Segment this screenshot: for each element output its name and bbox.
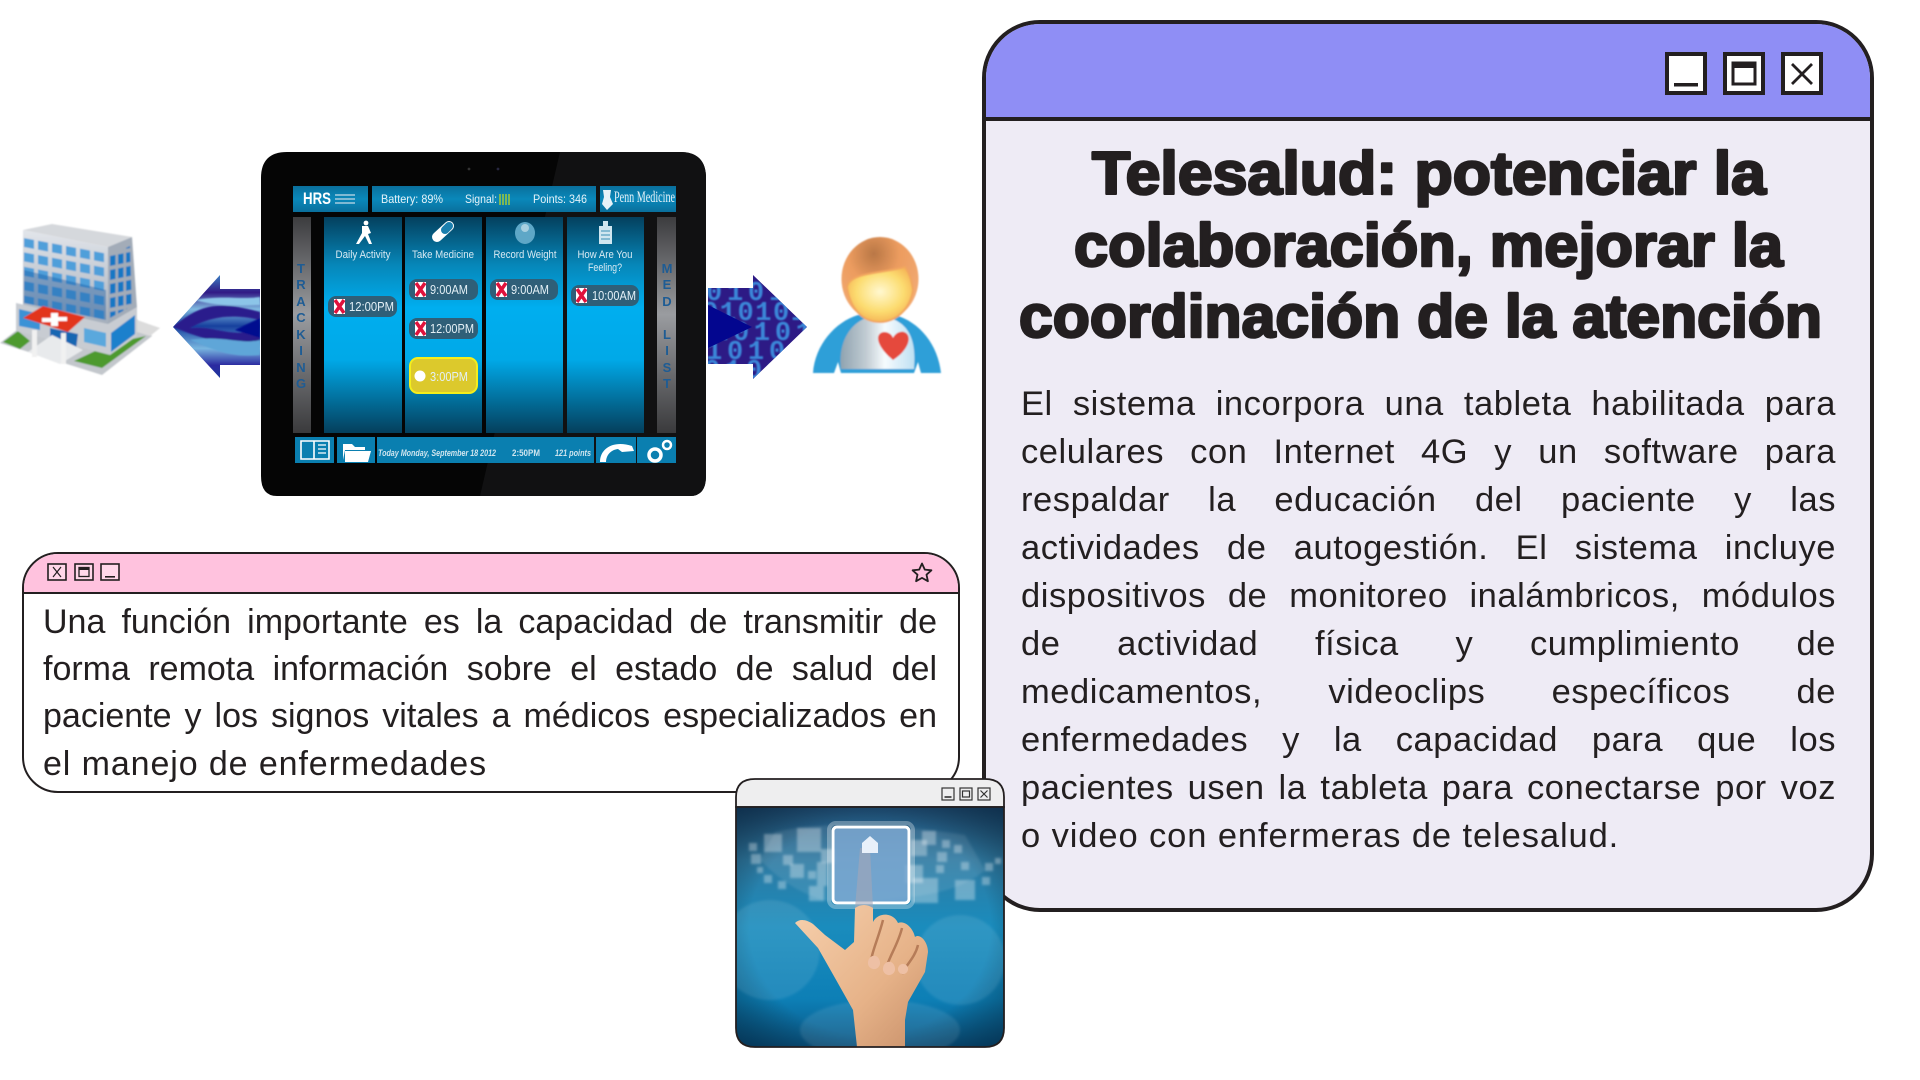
tablet column icons and labels: Daily Activity [336,249,391,261]
tablet medication time pills [328,279,639,393]
tablet side tabs and columns: A [296,294,306,309]
panel header bar [986,24,1870,121]
arrow: right toward patient: 010101 [702,299,807,329]
text block: system description: pacientes usen la tableta para conectarse por voz [1021,769,1836,807]
tablet medication time pills: 12:00PM [430,322,474,336]
text block: system description: de actividad física y cumplimiento de [1021,625,1836,663]
tablet side tabs and columns: G [296,376,306,391]
tablet side tabs and columns: I [665,343,669,358]
text block: system description: o video con enfermeras de telesalud. [1021,817,1619,855]
title: Telesalud: potenciar la [1092,140,1767,207]
tablet side tabs and columns [293,217,676,433]
arrow: right toward patient: 01010 [704,357,804,387]
title: colaboración, mejorar la [1074,212,1784,279]
text block: system description: celulares con Internet 4G y un software para [1021,433,1836,471]
text block: system description: dispositivos de monitoreo inalámbricos, módulos [1021,577,1836,615]
tablet status bar [293,186,676,212]
tablet side tabs and columns: R [296,277,306,292]
text block: system description: respaldar la educación del paciente y las [1021,481,1836,519]
text block: remote transmission: el manejo de enfermedades [43,745,487,783]
text block: system description: El sistema incorpora una tableta habilitada para [1021,385,1836,423]
title [1019,140,1822,350]
text block: remote transmission: paciente y los signos vitales a médicos especializados en [43,697,937,735]
tablet side tabs and columns: T [663,376,671,391]
window controls: minimize, maximize, close [1665,52,1823,95]
tablet status bar: Signal: [465,192,497,206]
arrow: right toward patient [708,275,807,379]
tablet status bar: Points: 346 [533,192,587,206]
panel: remote transmission note [22,552,960,793]
pink header bar [24,554,958,594]
tablet side tabs and columns: D [662,294,672,309]
arrow: left toward hospital [173,275,260,378]
tablet column icons and labels: Feeling? [588,262,622,274]
window frame [736,779,1004,807]
photo: finger touching virtual screen [736,808,1004,1046]
tablet side tabs and columns: K [296,327,306,342]
window controls [942,788,990,800]
panel: touch interface photo window [735,778,1005,1048]
tablet side tabs and columns: M [662,261,672,276]
text block: system description: medicamentos, videoclips específicos de [1021,673,1836,711]
tablet column icons and labels: How Are You [578,249,632,261]
text block: system description: actividades de autogestión. El sistema incluye [1021,529,1836,567]
tablet status bar: Penn Medicine [614,189,675,206]
tablet side tabs and columns: N [296,360,306,375]
tablet side tabs and columns: C [296,310,306,325]
text block: system description [1021,385,1836,855]
tablet status bar: Battery: 89% [381,192,443,206]
icon: hospital building [0,224,160,375]
arrow: right toward patient: 10101 [706,338,806,368]
tablet side tabs and columns: T [297,261,305,276]
tablet [261,152,706,496]
arrow: right toward patient: 10101 [712,319,812,349]
text block: remote transmission: forma remota información sobre el estado de salud del [43,650,937,688]
tablet bottom bar: 2:50PM [512,448,540,458]
tablet medication time pills: 10:00AM [592,289,636,303]
tablet side tabs and columns: E [663,277,672,292]
tablet column icons and labels: Record Weight [494,249,556,261]
tablet bottom bar [295,437,676,463]
tablet status bar: HRS [303,189,331,208]
tablet bottom bar: 121 points [555,448,591,458]
tablet side tabs and columns: S [663,360,672,375]
text block: system description: enfermedades y la capacidad para que los [1021,721,1836,759]
tablet side tabs and columns: I [299,343,303,358]
panel: main telehealth window [982,20,1874,912]
tablet medication time pills: 12:00PM [349,300,394,314]
text block: remote transmission: Una función importante es la capacidad de transmitir de [43,603,937,641]
tablet medication time pills: 9:00AM [511,283,549,297]
tablet medication time pills: 9:00AM [430,283,468,297]
arrow: right toward patient: 01010 [706,279,806,309]
text block: remote transmission [43,603,937,783]
tablet column icons and labels [336,221,632,274]
tablet bottom bar: Today Monday, September 18 2012 [378,448,496,458]
icon: patient with heart [813,237,941,373]
illustration: telehealth tablet diagram [0,152,942,496]
tablet column icons and labels: Take Medicine [412,249,474,261]
tablet medication time pills: 3:00PM [430,370,468,384]
window controls and star [47,562,932,582]
title: coordinación de la atención [1019,283,1822,350]
tablet side tabs and columns: L [663,327,671,342]
